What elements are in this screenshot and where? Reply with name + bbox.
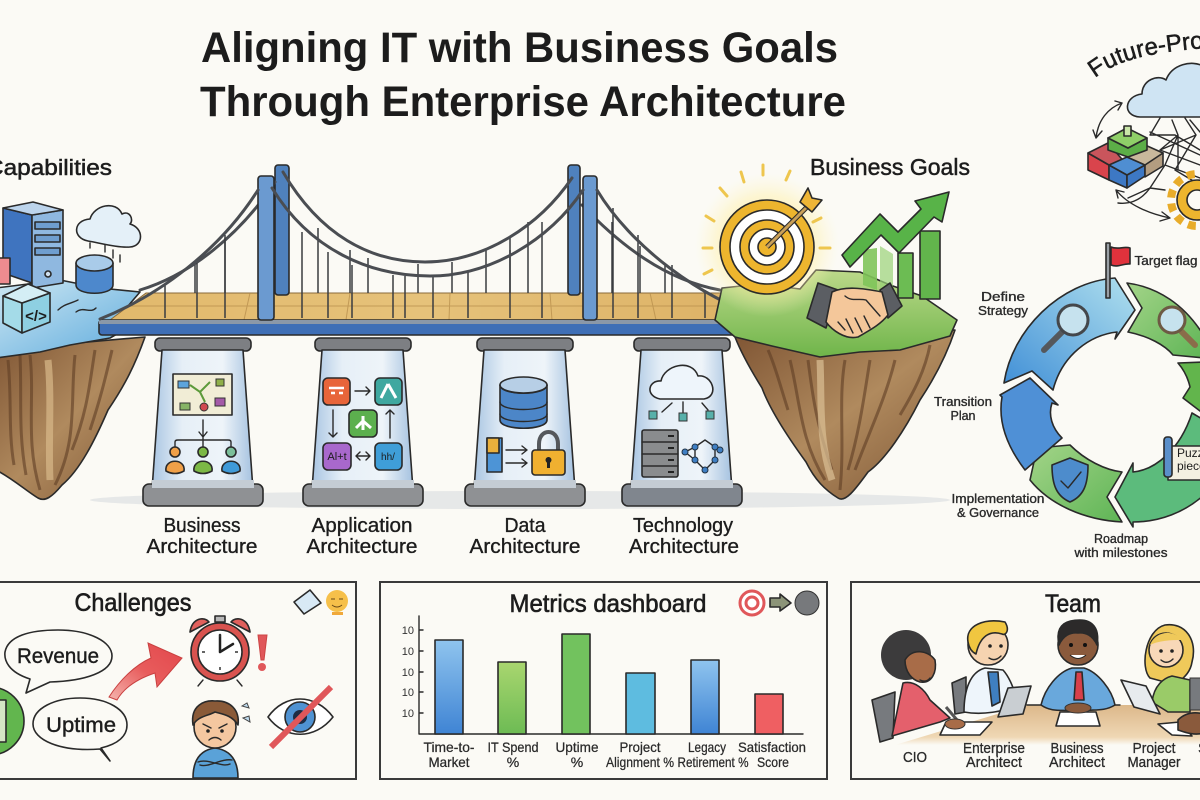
icon: application tiles bbox=[323, 378, 402, 470]
person: fifth partial bbox=[1158, 678, 1200, 736]
architecture labels: Architecture bbox=[146, 536, 258, 558]
cycle labels bbox=[934, 289, 1168, 560]
chart tick labels: 10 bbox=[402, 625, 414, 637]
cycle labels: Plan bbox=[950, 408, 976, 423]
bridge wood deck bbox=[110, 293, 745, 320]
chart tick labels: 10 bbox=[402, 667, 414, 679]
front cables bbox=[100, 188, 772, 320]
bridge bbox=[99, 165, 772, 335]
panel: business goals island bbox=[695, 154, 970, 499]
curve for future-proof heading bbox=[1095, 46, 1200, 78]
icon: building blocks bbox=[1088, 126, 1163, 188]
panel: challenges bbox=[0, 582, 356, 779]
icon: puzzle scroll bbox=[1164, 437, 1200, 480]
architecture labels: Architecture bbox=[629, 536, 739, 558]
icon: bullseye target bbox=[720, 188, 822, 294]
icon: alarm clock bbox=[190, 616, 250, 686]
meeting table bbox=[895, 705, 1200, 745]
icon: code cube: </> bbox=[25, 308, 47, 325]
segment: implementation bbox=[1030, 445, 1122, 522]
team role labels: CIO bbox=[903, 749, 927, 766]
icon: target flag bbox=[1106, 243, 1130, 298]
icon: application tiles: hh/ bbox=[381, 452, 395, 463]
front towers bbox=[258, 176, 274, 320]
cycle labels: with milestones bbox=[1073, 545, 1168, 560]
chart category labels: Score bbox=[757, 754, 789, 770]
network lines bbox=[1128, 118, 1200, 198]
icon: crossed eye bbox=[268, 687, 333, 747]
chart category labels: Time-to- bbox=[424, 739, 475, 755]
main deck beam bbox=[99, 320, 772, 335]
data arrows bbox=[506, 446, 527, 467]
architecture labels bbox=[146, 515, 739, 558]
cycle labels: Roadmap bbox=[1094, 531, 1148, 546]
org chart bbox=[175, 420, 231, 448]
icon: cloud bbox=[650, 365, 713, 399]
chart category labels bbox=[424, 739, 806, 770]
team role labels: Manager bbox=[1128, 754, 1181, 771]
icon: shield bbox=[1052, 458, 1088, 502]
cycle labels: Transition bbox=[934, 394, 992, 409]
icon: red box bbox=[0, 258, 10, 284]
panel: metrics dashboard bbox=[380, 582, 827, 779]
icon: padlock bbox=[532, 432, 565, 475]
person: CIO bbox=[872, 630, 992, 742]
architecture labels: Technology bbox=[633, 515, 733, 537]
rear towers bbox=[275, 165, 289, 295]
curved arrows bbox=[1093, 101, 1170, 221]
pier 1: business architecture bbox=[143, 338, 263, 506]
cycle labels: Define bbox=[981, 289, 1025, 304]
heading: metrics dashboard: Metrics dashboard bbox=[510, 590, 706, 618]
team role labels: Architect bbox=[1049, 754, 1106, 771]
rock under left island bbox=[0, 337, 145, 499]
icon: three people bbox=[166, 447, 240, 474]
pier 4: technology architecture bbox=[622, 338, 742, 506]
architecture labels: Data bbox=[504, 515, 546, 537]
target glow bbox=[695, 173, 839, 317]
icon: data document bbox=[487, 438, 502, 472]
chart category labels: Project bbox=[620, 739, 661, 755]
person: enterprise architect bbox=[952, 621, 1031, 717]
icon: handshake bbox=[807, 283, 902, 338]
callout: uptime: Uptime bbox=[46, 714, 116, 737]
front hangers bbox=[165, 208, 705, 318]
icon: pillow bbox=[294, 590, 321, 614]
ground shadow bbox=[90, 491, 950, 509]
chart tick labels: 10 bbox=[402, 687, 414, 699]
title: Aligning IT with Business Goals bbox=[201, 24, 838, 72]
person: business architect bbox=[1041, 620, 1115, 726]
architecture labels: Architecture bbox=[306, 536, 418, 558]
chart category labels: Satisfaction bbox=[738, 739, 806, 755]
icon: target arrow and circle bbox=[740, 591, 819, 615]
connector squiggle bbox=[58, 300, 96, 312]
architecture labels: Business bbox=[164, 515, 240, 537]
bar chart bbox=[435, 634, 783, 734]
icon: rain arrows bbox=[90, 243, 120, 262]
panel: team bbox=[851, 582, 1200, 779]
icon: server rack bbox=[642, 430, 678, 477]
cycle labels: Implementation bbox=[952, 491, 1044, 506]
icon: growth bars bbox=[863, 231, 940, 299]
chart category labels: Alignment % bbox=[606, 754, 674, 770]
team role labels: Business bbox=[1050, 740, 1104, 757]
icon: green circle bbox=[0, 687, 24, 755]
architecture labels: Application bbox=[312, 515, 412, 537]
icon: cloud bbox=[77, 206, 140, 247]
chart category labels: Uptime bbox=[556, 739, 599, 755]
icon: exclamation mark bbox=[258, 635, 267, 671]
chart category labels: % bbox=[571, 754, 583, 770]
chart category labels: IT Spend bbox=[488, 739, 538, 755]
icon: database cylinder bbox=[76, 255, 113, 293]
chart tick labels bbox=[402, 625, 414, 720]
icon: gear bbox=[1171, 174, 1200, 226]
title bbox=[200, 24, 846, 126]
team role labels: Architect bbox=[966, 754, 1023, 771]
cycle labels: & Governance bbox=[957, 505, 1039, 520]
sun rays bbox=[703, 165, 830, 274]
icon: hex network bbox=[682, 440, 723, 473]
chart tick labels: 10 bbox=[402, 646, 414, 658]
segment: top right bbox=[1127, 283, 1200, 358]
heading: challenges: Challenges bbox=[74, 589, 192, 617]
heading: team: Team bbox=[1045, 590, 1101, 618]
icon: server tower bbox=[3, 202, 63, 288]
person: project manager bbox=[1121, 625, 1193, 714]
icon: magnifier right bbox=[1159, 307, 1195, 345]
callout: revenue: Revenue bbox=[17, 645, 99, 668]
segment: roadmap arrow bbox=[1115, 413, 1200, 527]
callout: revenue bbox=[5, 630, 112, 693]
label: target flag: Target flag bbox=[1134, 253, 1198, 268]
panel: IT capabilities island bbox=[0, 155, 145, 499]
chart category labels: % bbox=[507, 754, 519, 770]
architecture labels: Architecture bbox=[470, 536, 580, 558]
icon: application tiles: Al+t bbox=[327, 451, 347, 463]
chart category labels: Market bbox=[428, 754, 470, 770]
panel: roadmap cycle bbox=[934, 243, 1200, 560]
segment: define strategy bbox=[1004, 278, 1135, 390]
icon: magnifier left bbox=[1044, 305, 1088, 350]
team role labels bbox=[903, 740, 1200, 771]
chart category labels: Retirement % bbox=[678, 754, 748, 770]
segment: right bbox=[1178, 362, 1200, 414]
segment: transition plan bbox=[1000, 378, 1062, 470]
icon: code cube bbox=[3, 284, 50, 333]
icon: emoji bbox=[326, 590, 348, 615]
application arrows bbox=[329, 387, 394, 460]
water platform bbox=[0, 280, 145, 358]
icon: growth arrow bbox=[842, 192, 949, 267]
rear cables and hangers bbox=[140, 172, 720, 293]
icon: cloud nodes bbox=[649, 402, 714, 421]
team role labels: Project bbox=[1132, 740, 1176, 757]
grassy top bbox=[715, 270, 957, 357]
icon: database stack bbox=[500, 377, 547, 428]
cycle labels: Strategy bbox=[978, 303, 1029, 318]
arrow: challenge arrow bbox=[109, 643, 182, 700]
chart axes bbox=[419, 616, 803, 734]
chart category labels: Legacy bbox=[688, 739, 726, 755]
pier 3: data architecture bbox=[465, 338, 585, 506]
icon: cloud bbox=[1127, 63, 1200, 117]
pier 2: application architecture bbox=[303, 338, 423, 506]
icon: process board bbox=[173, 374, 232, 415]
panel: future-proof bbox=[1086, 34, 1200, 230]
title: Through Enterprise Architecture bbox=[200, 78, 846, 126]
icon: frustrated person bbox=[193, 701, 250, 778]
callout: uptime bbox=[33, 698, 127, 761]
rock under right island bbox=[735, 330, 955, 499]
heading: business goals: Business Goals bbox=[810, 154, 970, 180]
team role labels: Enterprise bbox=[963, 740, 1025, 757]
chart tick labels: 10 bbox=[402, 708, 414, 720]
